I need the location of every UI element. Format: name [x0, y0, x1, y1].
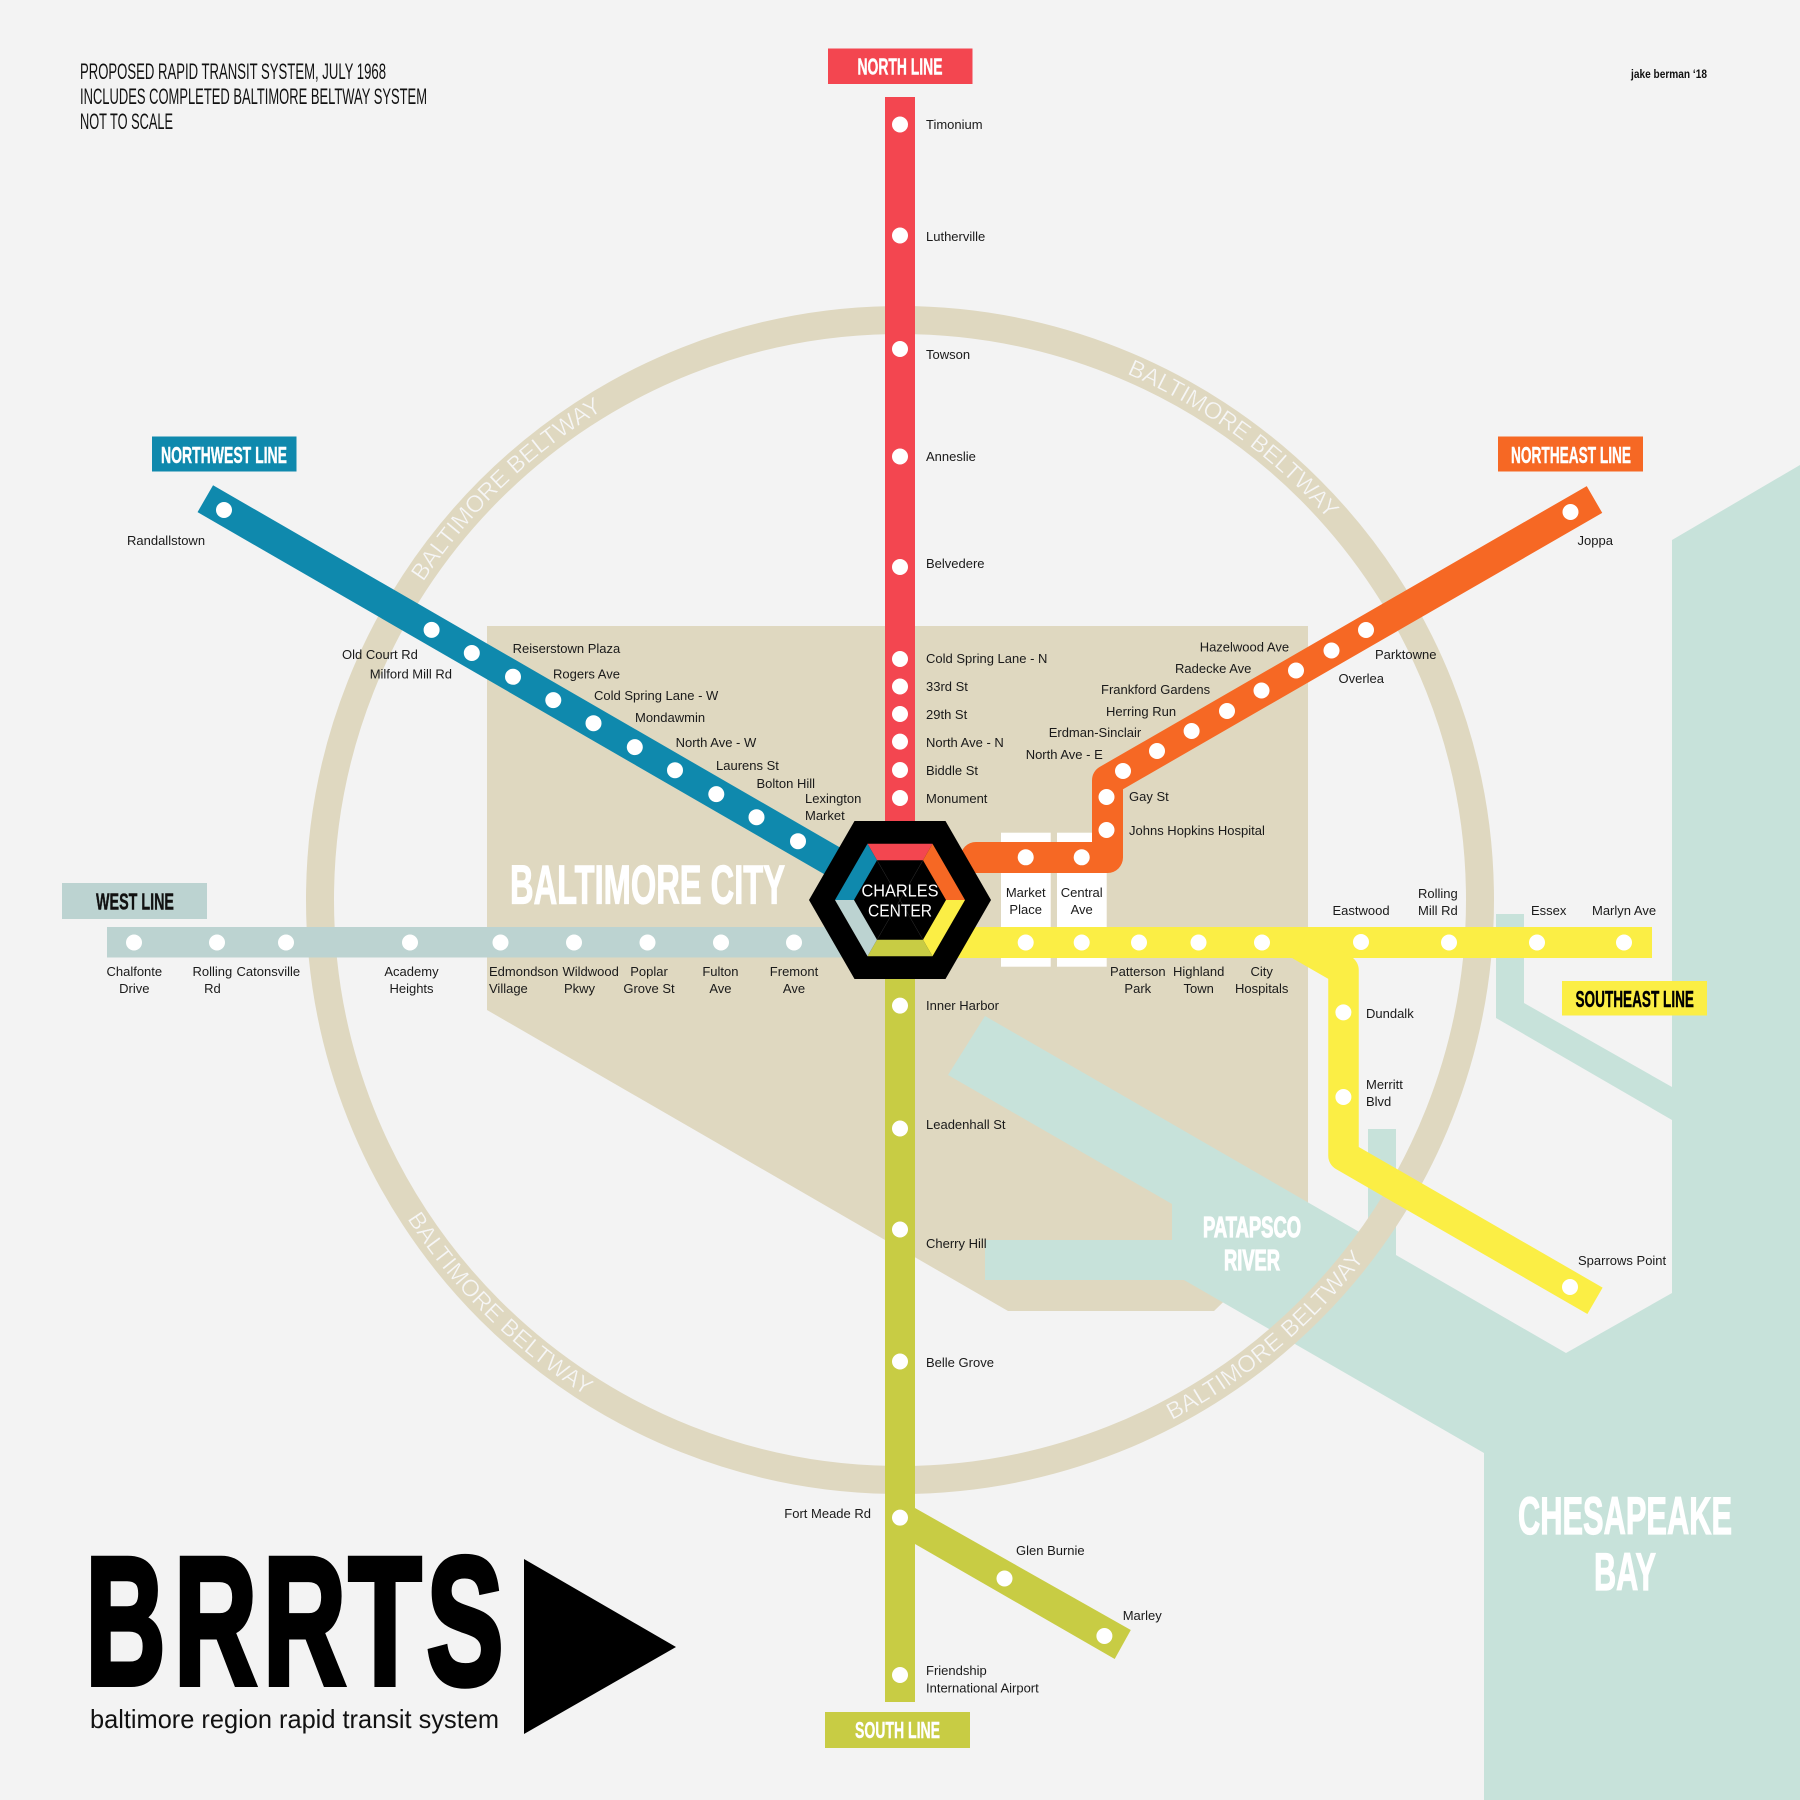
South Line: Friendship [926, 1663, 987, 1678]
Southeast Line: Highland [1173, 964, 1224, 979]
area label: Patapsco River [1203, 1212, 1301, 1277]
Southeast Line: Mill Rd [1418, 903, 1458, 918]
West Line: Grove St [623, 981, 675, 996]
Northeast Line: Market [1006, 885, 1046, 900]
Northeast Line: Overlea [1338, 671, 1385, 686]
Northeast Line: Central [1061, 885, 1103, 900]
West Line: Fremont [770, 964, 819, 979]
header notes: PROPOSED RAPID TRANSIT SYSTEM, JULY 1968 [80, 59, 386, 84]
South Line: Inner Harbor [926, 998, 1000, 1013]
North Line: Anneslie [926, 449, 976, 464]
line label: Northeast Line [1498, 436, 1643, 472]
Southeast Line: Essex [1531, 903, 1567, 918]
Baltimore Beltway ring [320, 320, 1480, 1480]
Northwest Line: Milford Mill Rd [370, 666, 452, 682]
West Line: Village [489, 981, 528, 996]
Beltway labels: BALTIMORE BELTWAY [1166, 1250, 1360, 1419]
line label: West Line [62, 883, 207, 919]
Northwest Line: Rogers Ave [553, 666, 620, 682]
West Line [106, 927, 843, 996]
area label: Chesapeake Bay: BAY [1594, 1543, 1656, 1602]
line label: Southeast Line [1562, 981, 1707, 1016]
Beltway labels: BALTIMORE BELTWAY [1128, 360, 1340, 514]
Southeast Line: Dundalk [1366, 1006, 1414, 1021]
North Line: Biddle St [926, 763, 978, 778]
area label: Patapsco River: RIVER [1224, 1245, 1280, 1277]
South Line: Cherry Hill [926, 1236, 987, 1251]
North Line: 29th St [926, 707, 968, 722]
South Line: Leadenhall St [926, 1117, 1006, 1132]
West Line: Drive [119, 981, 149, 996]
South Line: Marley [1123, 1608, 1162, 1623]
title logo: BRRTS: B [86, 1519, 166, 1723]
Northwest Line: Bolton Hill [756, 776, 815, 791]
West Line: Rd [204, 981, 221, 996]
Northeast Line: Ave [1071, 902, 1093, 917]
Southeast Line: Park [1124, 981, 1152, 996]
line label: Northwest Line: NORTHWEST LINE [161, 442, 287, 468]
line label: South Line: SOUTH LINE [855, 1717, 940, 1743]
Southeast Line: Merritt [1366, 1077, 1403, 1092]
North Line: Belvedere [926, 556, 985, 571]
Northwest Line: Laurens St [716, 758, 779, 773]
title logo: BRRTS: R [263, 1519, 346, 1723]
North Line: Towson [926, 347, 970, 362]
Southeast Line: Sparrows Point [1578, 1253, 1667, 1268]
Beltway labels: BALTIMORE BELTWAY [411, 397, 597, 580]
Southeast Line: Town [1184, 981, 1214, 996]
South Line: Glen Burnie [1016, 1543, 1085, 1558]
Northeast Line: Gay St [1129, 789, 1169, 804]
Beltway labels: BALTIMORE BELTWAY [408, 1212, 594, 1392]
title logo: BRRTS: baltimore region rapid transit system [90, 1704, 499, 1734]
South Line: International Airport [926, 1680, 1039, 1696]
North Line [885, 97, 1047, 837]
Southeast Line: Blvd [1366, 1094, 1391, 1109]
North Line: 33rd St [926, 679, 968, 694]
Charles Center hub hexagon [809, 821, 991, 979]
area label: Patapsco River: PATAPSCO [1203, 1212, 1301, 1244]
Charles Center hub hexagon: CENTER [868, 901, 932, 921]
Northeast Line: Place [1009, 902, 1042, 917]
Northwest Line [127, 499, 880, 888]
Southeast Line: Marlyn Ave [1592, 903, 1656, 918]
Northwest Line: Reiserstown Plaza [513, 641, 621, 656]
Northeast Line: Radecke Ave [1175, 661, 1251, 676]
Southeast Line: City [1251, 964, 1273, 979]
line label: North Line [828, 48, 972, 84]
Northeast Line [960, 500, 1614, 917]
Charles Center hub hexagon: CHARLES [862, 881, 938, 901]
North Line: Lutherville [926, 229, 985, 244]
Northwest Line: Cold Spring Lane - W [594, 688, 719, 703]
title logo: BRRTS [86, 1519, 504, 1734]
North Line: Monument [926, 791, 988, 806]
title logo: BRRTS: R [174, 1519, 257, 1723]
Beltway labels [408, 360, 1360, 1419]
Northwest Line: North Ave - W [676, 735, 757, 750]
title logo: BRRTS: S [426, 1519, 504, 1723]
white station boxes: Market Place and Central Ave [1001, 833, 1107, 967]
West Line: Ave [783, 981, 805, 996]
Northeast Line: Erdman-Sinclair [1049, 725, 1142, 740]
West Line: Fulton [702, 964, 738, 979]
West Line: Ave [709, 981, 731, 996]
Southeast Line: Eastwood [1332, 903, 1390, 918]
map area: Baltimore City [487, 626, 1308, 1311]
area label: Baltimore City: BALTIMORE CITY [510, 854, 785, 916]
Southeast Line: Rolling [1418, 886, 1458, 901]
map area: Patapsco River and Chesapeake Bay water [948, 465, 1800, 1800]
Northeast Line: Hazelwood Ave [1200, 640, 1289, 654]
line label: Southeast Line: SOUTHEAST LINE [1576, 986, 1694, 1012]
West Line: Catonsville [236, 964, 300, 979]
title logo: BRRTS: T [348, 1519, 422, 1723]
West Line: Academy [384, 964, 439, 979]
header notes: INCLUDES COMPLETED BALTIMORE BELTWAY SYSTEM [80, 84, 427, 109]
header notes: NOT TO SCALE [80, 109, 173, 134]
Northwest Line: Market [805, 808, 845, 823]
Northeast Line: Herring Run [1106, 704, 1176, 719]
line label: Northwest Line [152, 436, 296, 472]
South Line: Belle Grove [926, 1355, 994, 1370]
West Line: Wildwood [562, 964, 619, 979]
West Line: Chalfonte [106, 964, 162, 979]
West Line: Edmondson [489, 964, 558, 979]
Southeast Line: Patterson [1110, 964, 1166, 979]
line label: Northeast Line: NORTHEAST LINE [1511, 442, 1631, 468]
Southeast Line: Hospitals [1235, 981, 1289, 996]
South Line: Fort Meade Rd [784, 1506, 871, 1521]
line label: South Line [825, 1712, 970, 1748]
West Line: Poplar [630, 964, 668, 979]
Northeast Line: North Ave - E [1026, 747, 1103, 762]
Northeast Line: Parktowne [1375, 647, 1436, 662]
North Line: Cold Spring Lane - N [926, 651, 1047, 666]
Northeast Line: Joppa [1578, 533, 1614, 548]
Northwest Line: Old Court Rd [342, 647, 418, 662]
West Line: Rolling [193, 964, 232, 979]
icon: logo arrow triangle [524, 1559, 676, 1734]
South Line [784, 960, 1162, 1702]
Northwest Line: Randallstown [127, 533, 205, 548]
Northeast Line: Johns Hopkins Hospital [1129, 823, 1265, 838]
North Line: Timonium [926, 117, 983, 132]
line label: West Line: WEST LINE [96, 888, 174, 914]
Northwest Line: Mondawmin [635, 710, 705, 725]
area label: Chesapeake Bay [1518, 1487, 1732, 1602]
Northwest Line: Lexington [805, 791, 861, 806]
line label: North Line: NORTH LINE [858, 54, 942, 80]
West Line: Heights [389, 981, 434, 996]
Northeast Line: Frankford Gardens [1101, 682, 1211, 697]
map area: eastern inlet [1496, 914, 1672, 1120]
header notes [80, 59, 427, 134]
credit: jake berman ‘18 [1630, 67, 1707, 81]
Southeast Line [950, 886, 1667, 1301]
North Line: North Ave - N [926, 735, 1004, 750]
West Line: Pkwy [564, 981, 596, 996]
